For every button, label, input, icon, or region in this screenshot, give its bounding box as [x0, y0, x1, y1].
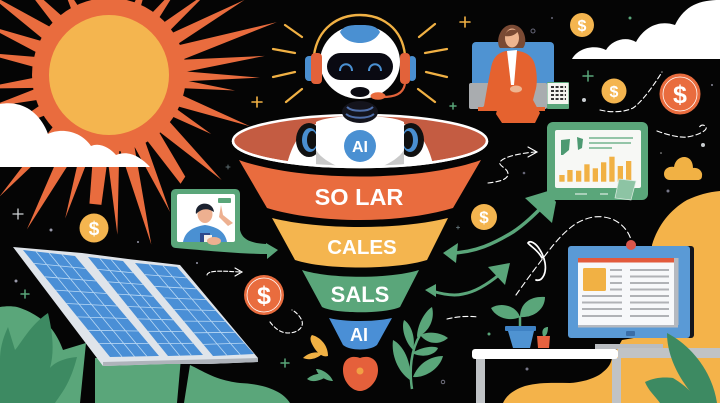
funnel tier: ai — [329, 318, 392, 350]
coin: centre yellow — [471, 204, 497, 230]
yellow background blob — [503, 191, 720, 403]
funnel tier: cales: CALES — [327, 236, 397, 259]
cloud left — [0, 103, 150, 167]
solar panels — [13, 247, 258, 366]
green ground shapes — [0, 306, 290, 403]
icon: sun — [0, 0, 281, 248]
robot with headset: AI — [352, 139, 368, 156]
curved arrow: funnel to plant — [425, 263, 510, 297]
leaf: dark left foliage — [0, 313, 77, 403]
coin: top yellow — [570, 13, 594, 37]
bar chart — [559, 157, 631, 182]
funnel rim front — [233, 141, 487, 167]
flower and leaf cluster — [303, 335, 378, 391]
sparkles and plus marks — [13, 17, 593, 367]
potted plant — [491, 297, 550, 348]
coin: large orange: $ — [673, 81, 687, 109]
funnel top bowl — [233, 115, 487, 220]
funnel tier: solar label: SO LAR — [315, 184, 403, 210]
dashed connectors — [207, 72, 706, 333]
coin: mid yellow: $ — [610, 84, 619, 101]
video call card with man — [171, 189, 278, 259]
funnel tier: ai: AI — [350, 325, 368, 345]
funnel tier: sals — [302, 270, 419, 312]
coin: lower orange: $ — [257, 282, 271, 310]
yellow small cloud — [664, 157, 702, 180]
coin: lower orange — [244, 275, 284, 315]
coin: centre yellow: $ — [479, 208, 489, 227]
funnel tier: sals: SALS — [331, 282, 389, 307]
coin: mid yellow — [602, 78, 626, 104]
coin: large orange — [660, 74, 700, 114]
curved arrow: funnel to laptop — [443, 191, 556, 263]
coin: left yellow: $ — [89, 219, 100, 240]
monitor — [568, 240, 694, 338]
leafy branch — [393, 307, 448, 389]
chart laptop — [547, 122, 648, 200]
woman on sofa — [469, 25, 569, 123]
funnel tier: cales — [272, 218, 448, 268]
cloud right — [572, 0, 720, 59]
coin: left yellow — [80, 214, 108, 242]
leaf: bottom right — [645, 333, 717, 403]
coin: top yellow: $ — [578, 18, 587, 35]
table — [472, 344, 720, 403]
robot with headset — [273, 15, 447, 170]
